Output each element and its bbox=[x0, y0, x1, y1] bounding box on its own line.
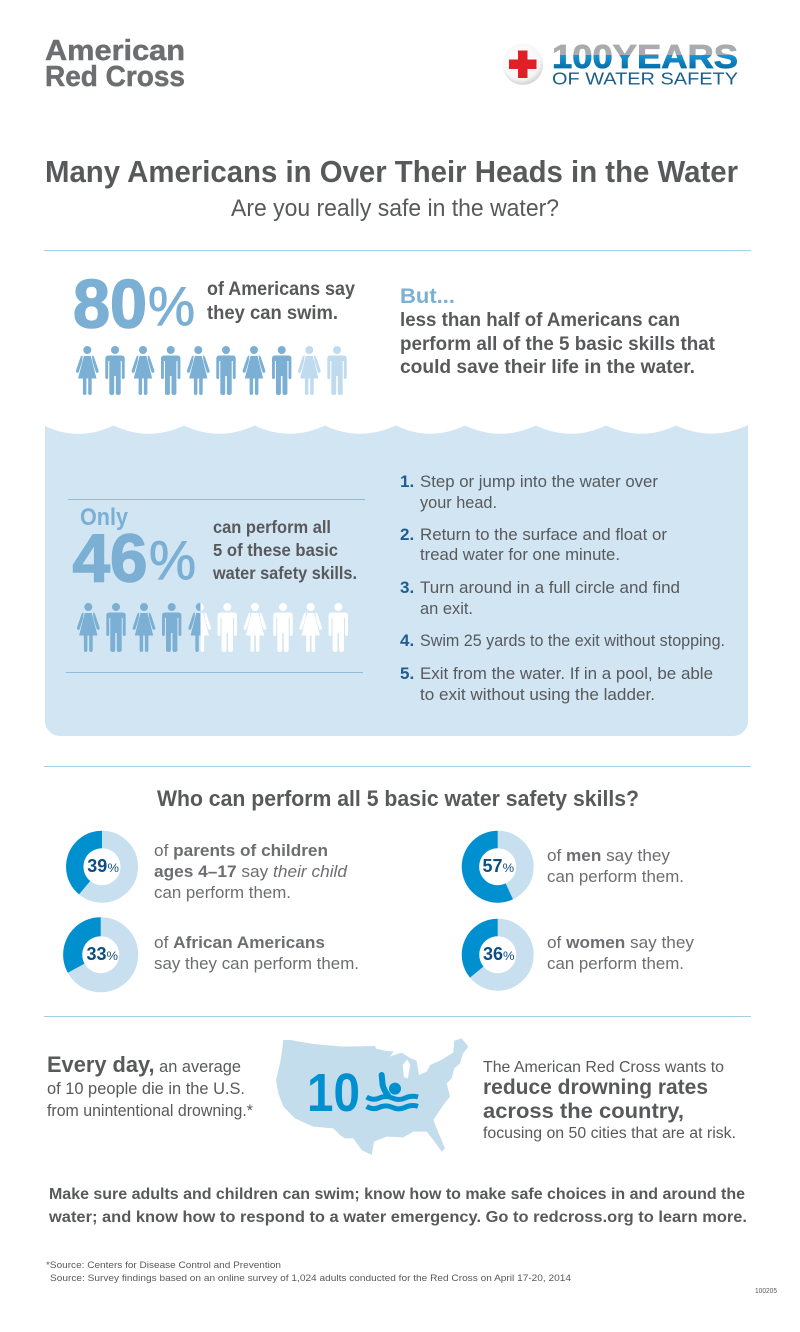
logo: American Red Cross: American bbox=[45, 35, 185, 67]
list: five basic skills: 1. bbox=[400, 472, 414, 491]
callout: less than half can perform skills: less than half of Americans can bbox=[400, 310, 680, 331]
text: every day: from unintentional drowning.* bbox=[47, 1102, 254, 1120]
text: every day: of 10 people die in the U.S. bbox=[47, 1080, 245, 1098]
text: reduce drowning rates: focusing on 50 cities that are at risk. bbox=[483, 1125, 736, 1142]
stat: only 46 percent: Only bbox=[80, 504, 129, 531]
donut: men 57 percent: % bbox=[503, 863, 514, 875]
stat: only 46 percent: can perform all bbox=[213, 517, 331, 537]
stat: only 46 percent: 5 of these basic bbox=[213, 540, 338, 560]
text: every day bbox=[47, 1052, 254, 1120]
stat: 80 percent can swim: 80 bbox=[73, 266, 147, 342]
stat: only 46 percent: 46 bbox=[72, 520, 148, 596]
stat: 80 percent can swim: % bbox=[148, 275, 195, 337]
callout: less than half can perform skills: could save their life in the water. bbox=[400, 357, 695, 378]
donut: women 36 percent: 36 bbox=[483, 944, 503, 964]
list: five basic skills: Return to the surface and float or bbox=[420, 525, 667, 544]
donut: men 57 percent bbox=[462, 831, 525, 903]
text: African Americans: say they can perform them. bbox=[154, 954, 359, 973]
text: African Americans bbox=[154, 933, 359, 973]
pictogram: 4.6 of 10 people bbox=[77, 603, 348, 652]
heading: who can perform: Who can perform all 5 basic water safety skills? bbox=[157, 786, 639, 811]
call to action: Make sure adults and children can swim; know how to make safe choices in and around the bbox=[49, 1186, 745, 1203]
sources: *Source: Centers for Disease Control and Prevention bbox=[46, 1260, 281, 1271]
logo: 100 years of water safety bbox=[503, 38, 738, 88]
donut: men 57 percent: 57 bbox=[482, 856, 502, 876]
logo: 100 years of water safety: OF WATER SAFETY bbox=[552, 68, 738, 88]
text: reduce drowning rates: reduce drowning rates bbox=[483, 1076, 708, 1099]
map: United States with 10 and swimmer bbox=[276, 1038, 468, 1155]
donut: African Americans 33 percent bbox=[63, 917, 129, 983]
text: women: can perform them. bbox=[547, 954, 684, 973]
panel: water background bbox=[45, 425, 748, 736]
list: five basic skills: your head. bbox=[420, 493, 497, 512]
call to action bbox=[48, 1186, 747, 1226]
text: reduce drowning rates bbox=[483, 1059, 736, 1142]
stat: 80 percent can swim: of Americans say bbox=[207, 279, 355, 300]
callout: less than half can perform skills: perform all of the 5 basic skills that bbox=[400, 334, 716, 355]
list: five basic skills bbox=[400, 472, 725, 704]
callout: less than half can perform skills bbox=[400, 285, 716, 378]
list: five basic skills: 5. bbox=[400, 664, 414, 683]
donut: parents 39 percent: 39 bbox=[87, 856, 107, 876]
list: five basic skills: Exit from the water. If in a pool, be able bbox=[420, 664, 713, 683]
sources bbox=[46, 1260, 571, 1284]
list: five basic skills: Swim 25 yards to the exit without stopping. bbox=[420, 631, 725, 650]
subtitle: Are you really safe in the water? bbox=[231, 195, 559, 222]
text: women bbox=[547, 933, 694, 973]
stat: 80 percent can swim: they can swim. bbox=[207, 303, 338, 324]
pictogram: 8 of 10 people bbox=[76, 346, 347, 395]
donut: African Americans 33 percent: 33 bbox=[86, 944, 106, 964]
text: every day: Every day, an average bbox=[47, 1052, 241, 1077]
callout: less than half can perform skills: But... bbox=[400, 285, 455, 308]
text: men: can perform them. bbox=[547, 867, 684, 886]
text: women: of women say they bbox=[547, 933, 694, 952]
stat: only 46 percent bbox=[72, 504, 357, 596]
text: parents of children bbox=[154, 841, 348, 902]
document code: 100205 bbox=[755, 1288, 777, 1295]
list: five basic skills: 4. bbox=[400, 631, 414, 650]
text: parents of children: can perform them. bbox=[154, 883, 291, 902]
text: men: of men say they bbox=[547, 846, 670, 865]
text: parents of children: ages 4–17 say their child bbox=[154, 862, 348, 881]
list: five basic skills: Step or jump into the water over bbox=[420, 472, 658, 491]
list: five basic skills: 3. bbox=[400, 578, 414, 597]
text: parents of children: of parents of children bbox=[154, 841, 328, 860]
text: reduce drowning rates: The American Red Cross wants to bbox=[483, 1059, 724, 1076]
list: five basic skills: to exit without using the ladder. bbox=[420, 685, 655, 704]
sources: Source: Survey findings based on an online survey of 1,024 adults conducted for the Red Cross on April 17-20, 2014 bbox=[50, 1273, 571, 1284]
text: African Americans: of African Americans bbox=[154, 933, 325, 952]
donut: women 36 percent bbox=[462, 919, 525, 982]
list: five basic skills: 2. bbox=[400, 525, 414, 544]
list: five basic skills: Turn around in a full circle and find bbox=[420, 578, 680, 597]
list: five basic skills: tread water for one minute. bbox=[420, 545, 620, 564]
logo: American Red Cross: Red Cross bbox=[45, 61, 185, 93]
logo: American Red Cross bbox=[45, 35, 185, 93]
stat: only 46 percent: % bbox=[149, 529, 196, 591]
donut: parents 39 percent: % bbox=[108, 863, 119, 875]
text: reduce drowning rates: across the country, bbox=[483, 1100, 684, 1123]
stat: 80 percent can swim bbox=[73, 266, 355, 342]
list: five basic skills: an exit. bbox=[420, 599, 473, 618]
stat: only 46 percent: water safety skills. bbox=[212, 563, 357, 583]
title: Many Americans in Over Their Heads in the Water bbox=[45, 154, 738, 189]
donut: women 36 percent: % bbox=[503, 951, 514, 963]
donut: African Americans 33 percent: % bbox=[106, 951, 118, 963]
map: United States with 10 and swimmer: 10 bbox=[307, 1063, 360, 1123]
call to action: water; and know how to respond to a water emergency. Go to redcross.org to learn more. bbox=[48, 1209, 747, 1226]
text: men bbox=[547, 846, 684, 886]
donut: parents 39 percent bbox=[66, 831, 129, 894]
logo: 100 years of water safety: 100YEARS bbox=[552, 38, 738, 75]
